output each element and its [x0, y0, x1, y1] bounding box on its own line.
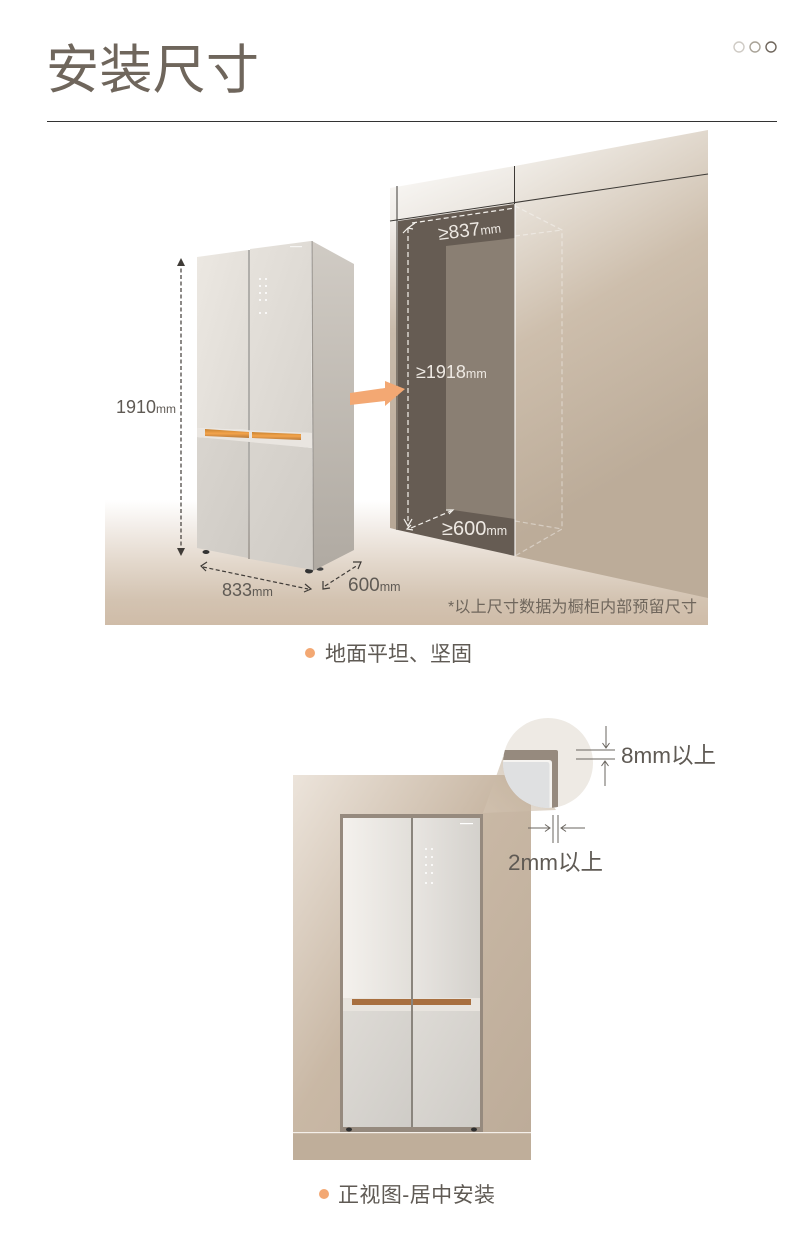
fridge: perspective view: [197, 241, 354, 574]
recess opening: [398, 204, 515, 556]
floor: [105, 500, 708, 625]
label: recess depth: ≥600mm: [442, 518, 507, 540]
label: height: 1910mm: [116, 397, 176, 417]
fridge: front view: [343, 818, 480, 1132]
dimension: height: [177, 258, 185, 556]
panel: front view: [293, 775, 531, 1160]
caption: flat floor: 地面平坦、坚固: [325, 643, 472, 666]
page indicator dots: [734, 42, 776, 52]
dimension: width: [201, 562, 311, 592]
label: top gap: 8mm以上: [621, 743, 716, 768]
label: width: 833mm: [222, 580, 273, 600]
footnote: *以上尺寸数据为橱柜内部预留尺寸: [448, 598, 697, 616]
label: depth: 600mm: [348, 575, 401, 596]
arrow: fridge into cabinet: [350, 381, 405, 406]
cabinet wall: [390, 130, 708, 598]
header divider: [47, 121, 777, 122]
caption: centered install: 正视图-居中安装: [338, 1184, 495, 1207]
niche background: [293, 775, 531, 1160]
label: side gap: 2mm以上: [508, 850, 603, 875]
niche frame: [340, 814, 483, 1132]
magnifier: corner detail: [503, 718, 593, 808]
label: recess width: ≥837mm: [437, 216, 502, 245]
panel: installation perspective scene: [105, 130, 708, 625]
floor band: [293, 1132, 531, 1160]
recess dimension arrows: [403, 208, 515, 530]
handle band: [197, 428, 312, 448]
dimension: depth: [323, 562, 361, 589]
control panel: [259, 278, 267, 314]
label: recess height: ≥1918mm: [416, 362, 487, 382]
gap marker: top 8mm: [576, 726, 615, 786]
title: 安装尺寸: [46, 41, 259, 100]
gap marker: side 2mm: [528, 815, 585, 843]
magnifier wedge: [483, 757, 556, 813]
fridge ghost outline: [515, 206, 562, 556]
